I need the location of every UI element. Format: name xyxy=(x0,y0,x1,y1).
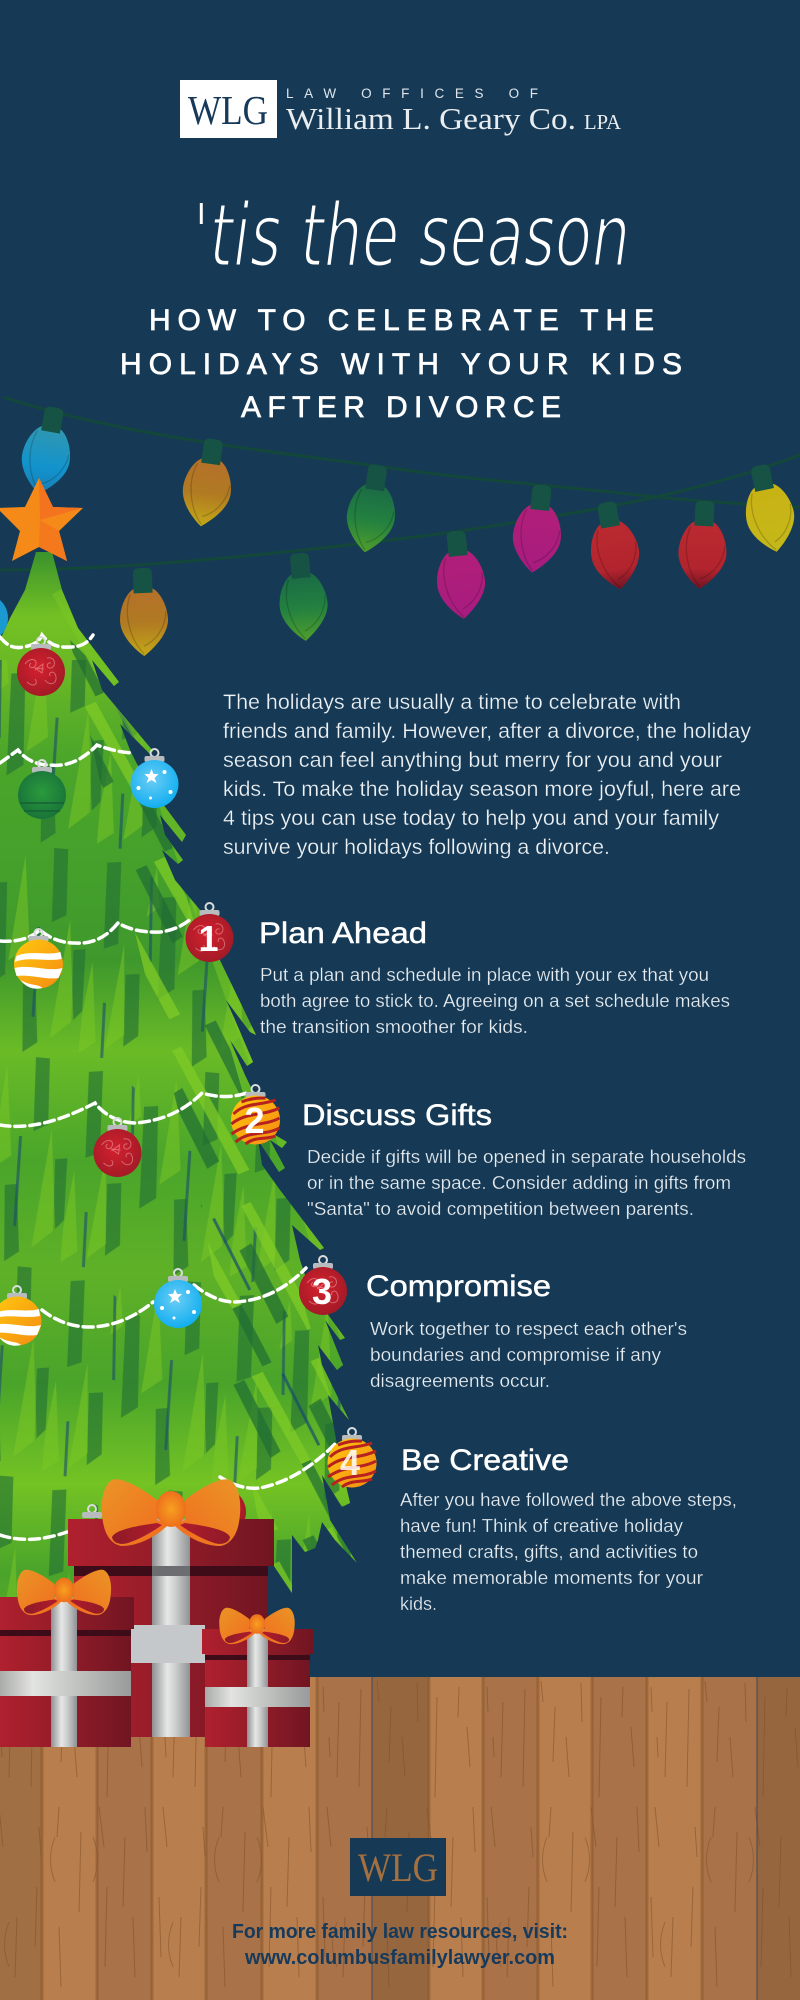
subtitle: HOW TO CELEBRATE THE xyxy=(149,304,654,337)
christmas tree xyxy=(0,478,376,1650)
number ornament 4 xyxy=(328,1428,376,1488)
footer call to action xyxy=(232,1921,568,1969)
tip 2 text: Decide if gifts will be opened in separate households xyxy=(307,1146,746,1167)
tip 1 text xyxy=(260,964,730,1037)
bulb: blue xyxy=(16,403,78,498)
tip 2 text: "Santa" to avoid competition between parents. xyxy=(307,1198,694,1219)
intro text: The holidays are usually a time to celebrate with xyxy=(223,690,681,714)
number ornament 4: 4 xyxy=(340,1442,360,1483)
number ornament 2 xyxy=(231,1085,280,1144)
right bow xyxy=(219,1608,295,1644)
intro text: friends and family. However, after a divorce, the holiday xyxy=(223,719,751,743)
number ornament 3: 3 xyxy=(312,1271,332,1312)
gifts xyxy=(0,1479,313,1747)
tip 4 xyxy=(400,1444,737,1614)
subtitle xyxy=(120,304,682,424)
tip 2 text xyxy=(307,1146,746,1219)
ornament: blue lower xyxy=(154,1269,202,1328)
footer call to action: www.columbusfamilylawyer.com xyxy=(244,1947,555,1969)
hidden green ornament behind gift xyxy=(70,1505,114,1564)
ornament: yellow left xyxy=(0,1286,42,1346)
subtitle: HOLIDAYS WITH YOUR KIDS xyxy=(120,348,682,381)
tip 4 text: kids. xyxy=(400,1593,437,1614)
right gift xyxy=(202,1608,313,1747)
number ornament 1: 1 xyxy=(198,918,219,959)
heading: plan ahead: Plan Ahead xyxy=(259,917,427,950)
heading: be creative: Be Creative xyxy=(401,1444,569,1477)
footer call to action: For more family law resources, visit: xyxy=(232,1921,568,1943)
blue ornament at left edge xyxy=(0,594,8,642)
tip 1 xyxy=(259,917,730,1037)
ornament: green xyxy=(18,760,66,819)
number ornament 1 xyxy=(186,903,234,962)
tip 4 text: have fun! Think of creative holiday xyxy=(400,1515,684,1536)
ornament: yellow xyxy=(14,929,63,989)
header logo xyxy=(180,80,622,138)
bulb: amber xyxy=(178,436,238,530)
intro text: 4 tips you can use today to help you and your family xyxy=(223,806,719,830)
intro text: survive your holidays following a divorce. xyxy=(223,835,610,859)
wooden floor xyxy=(0,1677,800,2000)
tip 3 xyxy=(366,1270,687,1391)
intro text: season can feel anything but merry for you and your xyxy=(223,748,722,772)
number ornament 3 xyxy=(299,1256,347,1315)
law offices label: LAW OFFICES OF xyxy=(286,86,538,101)
subtitle: AFTER DIVORCE xyxy=(241,391,561,424)
ornament: red lower xyxy=(94,1118,142,1177)
hidden red ornament behind gift xyxy=(198,1488,246,1536)
tip 1 text: both agree to stick to. Agreeing on a set schedule makes xyxy=(260,990,730,1011)
large bow xyxy=(102,1479,240,1546)
footer logo xyxy=(350,1838,446,1896)
bulb: yellow xyxy=(736,460,800,557)
bulb: lower green xyxy=(275,551,331,643)
tip 2 xyxy=(302,1099,746,1219)
string lights xyxy=(0,397,800,657)
tip 1 text: Put a plan and schedule in place with your ex that you xyxy=(260,964,709,985)
tip 3 text: Work together to respect each other's xyxy=(370,1318,687,1339)
tip 3 text xyxy=(370,1318,687,1391)
bulb: red xyxy=(583,498,645,593)
bulb: lower magenta xyxy=(432,529,489,621)
left gift xyxy=(0,1570,134,1747)
heading: compromise: Compromise xyxy=(366,1270,551,1303)
light wires xyxy=(0,397,800,570)
tip 4 text: make memorable moments for your xyxy=(400,1567,703,1588)
bulb: lower amber xyxy=(118,567,169,657)
large gift xyxy=(68,1479,274,1737)
bulb: green xyxy=(342,462,402,556)
tip 4 text xyxy=(400,1489,737,1614)
tip 1 text: the transition smoother for kids. xyxy=(260,1016,528,1037)
intro text xyxy=(223,690,751,859)
tip 2 text: or in the same space. Consider adding in gifts from xyxy=(307,1172,731,1193)
tip 3 text: disagreements occur. xyxy=(370,1370,550,1391)
heading: discuss gifts: Discuss Gifts xyxy=(302,1099,492,1132)
tip 4 text: After you have followed the above steps, xyxy=(400,1489,737,1510)
intro text: kids. To make the holiday season more joyful, here are xyxy=(223,777,741,801)
left bow xyxy=(17,1570,111,1615)
footer logo: WLG xyxy=(358,1845,438,1890)
tip 3 text: boundaries and compromise if any xyxy=(370,1344,662,1365)
ornament: blue xyxy=(130,749,178,808)
bulb: dark red xyxy=(677,500,729,590)
bulb: magenta xyxy=(509,483,566,575)
tip 4 text: themed crafts, gifts, and activities to xyxy=(400,1541,698,1562)
firm suffix: LPA xyxy=(584,110,622,134)
logo mark: WLG xyxy=(188,87,268,133)
star xyxy=(0,478,83,561)
garlands xyxy=(0,635,337,1539)
firm name: William L. Geary Co. xyxy=(286,101,576,136)
number ornament 2: 2 xyxy=(244,1100,265,1141)
ornament: red xyxy=(17,637,65,696)
